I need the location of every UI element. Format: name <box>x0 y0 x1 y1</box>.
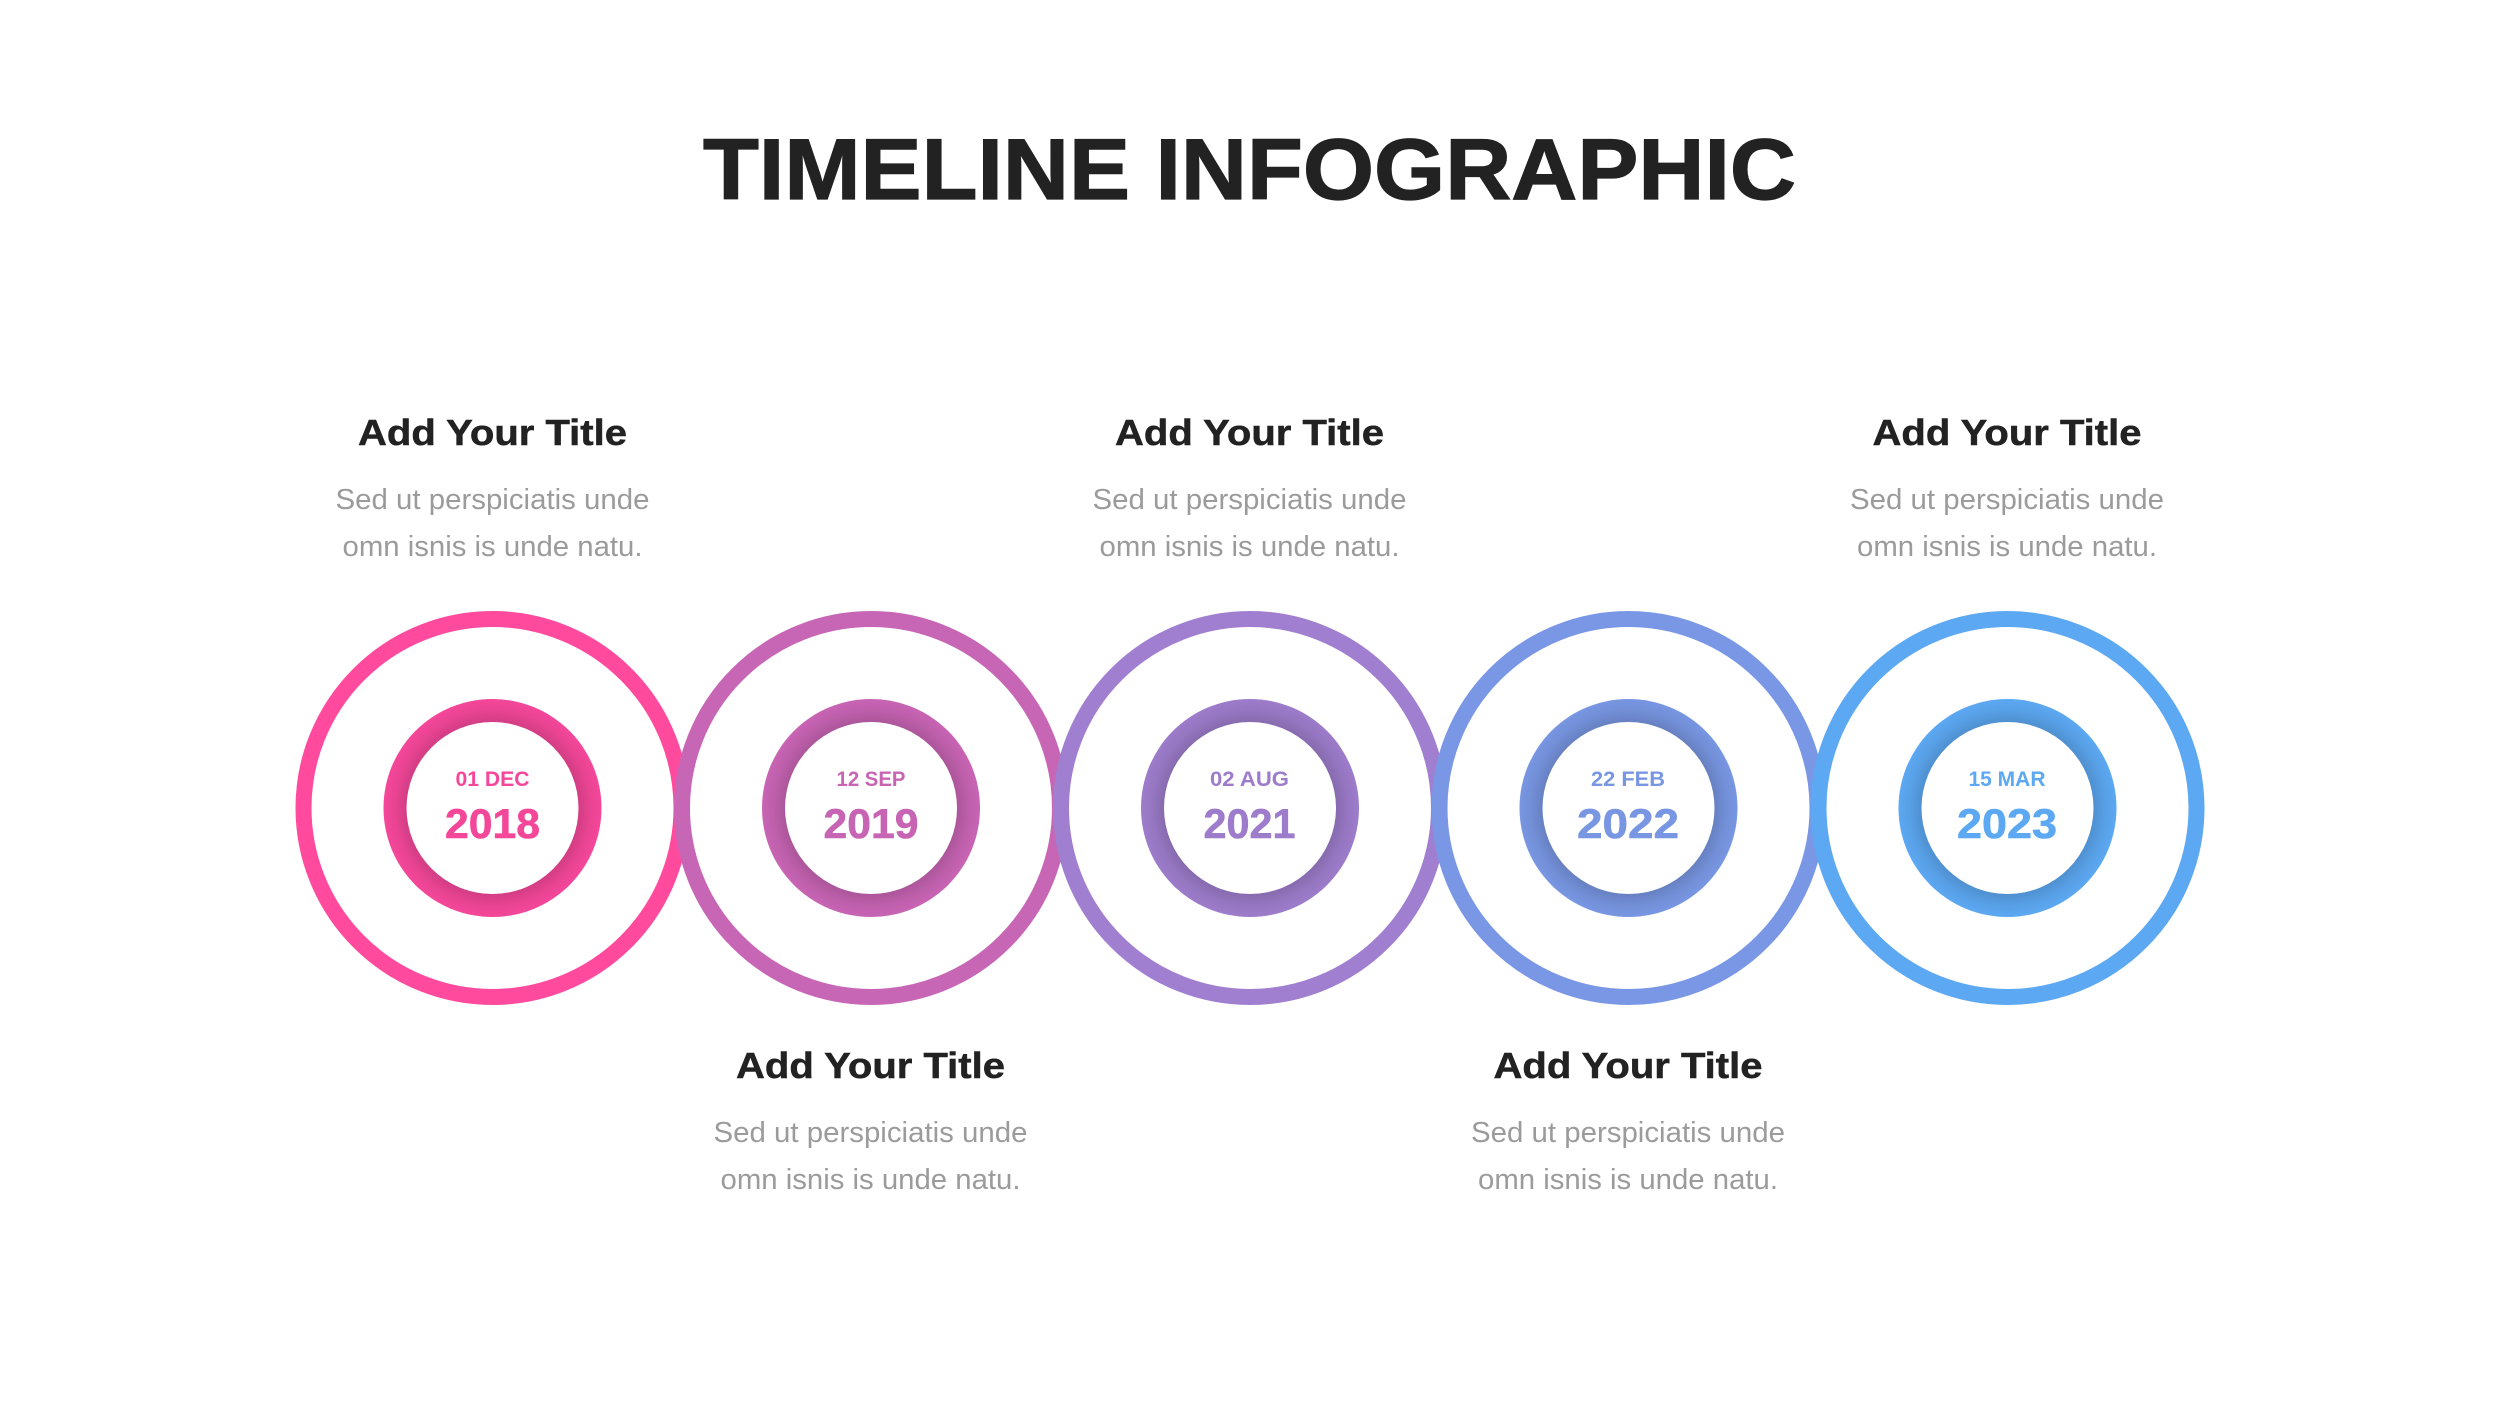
description 2021: omn isnis is unde natu. <box>1100 531 1400 563</box>
milestone 2021 <box>1061 619 1439 997</box>
outer ring 2023 <box>1818 619 2196 997</box>
text block 2018 <box>336 412 650 563</box>
outer ring 2021 <box>1061 619 1439 997</box>
description 2019: Sed ut perspiciatis unde <box>714 1117 1028 1149</box>
year 2018: 2018 <box>445 800 540 847</box>
milestone 2018 <box>304 619 682 997</box>
text block 2022 <box>1471 1045 1785 1196</box>
date 2021: 02 AUG <box>1210 767 1289 791</box>
heading 2018: Add Your Title <box>358 412 627 453</box>
inner badge 2021 <box>1141 699 1359 917</box>
date 2019: 12 SEP <box>836 767 906 791</box>
milestone 2023 <box>1818 619 2196 997</box>
description 2019 <box>714 1117 1028 1196</box>
heading 2019: Add Your Title <box>736 1045 1005 1086</box>
date 2023: 15 MAR <box>1968 767 2046 791</box>
text block 2019 <box>714 1045 1028 1196</box>
description 2022 <box>1471 1117 1785 1196</box>
title: TIMELINE INFOGRAPHIC <box>703 122 1796 218</box>
heading 2022: Add Your Title <box>1494 1045 1762 1086</box>
text block 2023 <box>1850 412 2164 563</box>
outer ring 2019 <box>682 619 1060 997</box>
heading 2021: Add Your Title <box>1115 412 1384 453</box>
description 2023 <box>1850 484 2164 563</box>
year 2021: 2021 <box>1204 800 1296 847</box>
description 2022: omn isnis is unde natu. <box>1478 1164 1778 1196</box>
description 2023: Sed ut perspiciatis unde <box>1850 484 2164 516</box>
description 2018: Sed ut perspiciatis unde <box>336 484 650 516</box>
date 2018: 01 DEC <box>456 767 530 791</box>
description 2023: omn isnis is unde natu. <box>1857 531 2157 563</box>
text block 2021 <box>1092 412 1406 563</box>
year 2019: 2019 <box>824 800 918 847</box>
milestone 2022 <box>1440 619 1818 997</box>
outer ring 2018 <box>304 619 682 997</box>
description 2018 <box>336 484 650 563</box>
inner badge 2018 <box>384 699 602 917</box>
outer ring 2022 <box>1440 619 1818 997</box>
year 2023: 2023 <box>1957 800 2057 847</box>
milestone 2019 <box>682 619 1060 997</box>
inner badge 2022 <box>1520 699 1738 917</box>
description 2021: Sed ut perspiciatis unde <box>1092 484 1406 516</box>
heading 2023: Add Your Title <box>1872 412 2142 453</box>
description 2018: omn isnis is unde natu. <box>342 531 642 563</box>
description 2022: Sed ut perspiciatis unde <box>1471 1117 1785 1149</box>
inner badge 2023 <box>1898 699 2116 917</box>
description 2019: omn isnis is unde natu. <box>720 1164 1020 1196</box>
date 2022: 22 FEB <box>1591 767 1665 791</box>
inner badge 2019 <box>762 699 980 917</box>
year 2022: 2022 <box>1577 800 1679 847</box>
description 2021 <box>1092 484 1406 563</box>
